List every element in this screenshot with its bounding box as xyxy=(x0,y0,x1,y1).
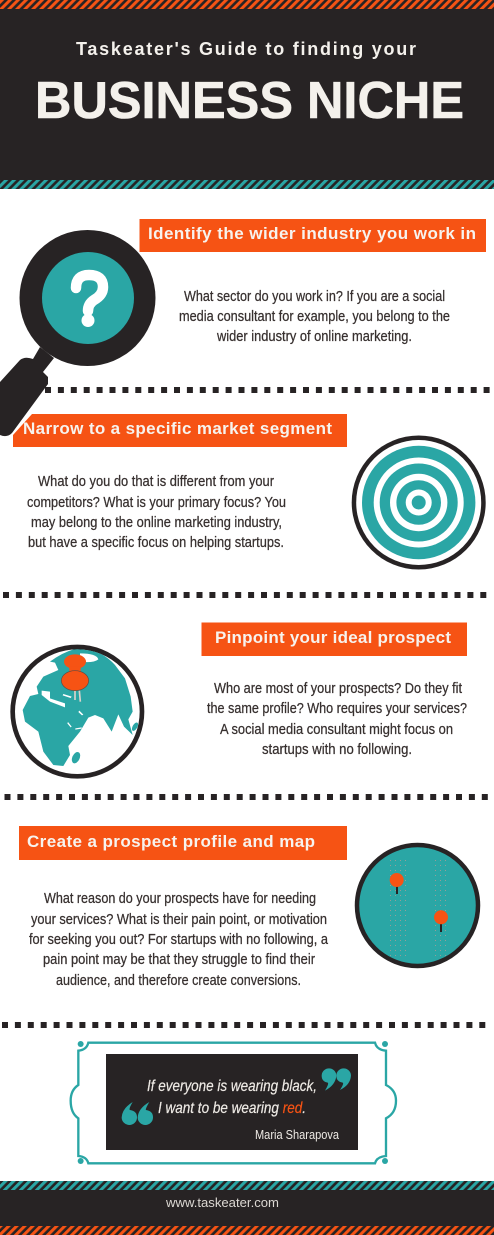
heading bar 4 xyxy=(19,826,347,860)
body text 2: but have a specific focus on helping startups. xyxy=(28,535,284,551)
section 3: ideal prospect xyxy=(13,622,467,776)
heading bar 2 xyxy=(13,414,347,447)
body text 1 xyxy=(179,289,450,345)
heading bar 3 xyxy=(202,622,467,656)
icon: closing quote mark xyxy=(322,1068,351,1091)
body text 3: Who are most of your prospects? Do they fit xyxy=(214,681,462,697)
divider dots xyxy=(2,390,491,1025)
footer banner xyxy=(0,1181,494,1235)
body text 4: for seeking you out? For startups with no following, a xyxy=(29,932,329,948)
quote box xyxy=(106,1054,358,1150)
header banner xyxy=(0,0,494,189)
header subtitle: Taskeater's Guide to finding your xyxy=(76,39,416,59)
ornate frame xyxy=(71,1041,396,1164)
quote author: Maria Sharapova xyxy=(255,1128,339,1142)
quote text xyxy=(147,1078,317,1117)
heading bar 3: Pinpoint your ideal prospect xyxy=(215,628,451,647)
body text 3 xyxy=(207,681,467,758)
icon: magnifying glass xyxy=(0,230,156,436)
body text 1: media consultant for example, you belong to the xyxy=(179,309,450,325)
body text 4: your services? What is their pain point, or motivation xyxy=(31,912,327,928)
icon: map with pins xyxy=(357,845,478,966)
body text 1: What sector do you work in? If you are a social xyxy=(184,289,445,305)
body text 4: audience, and therefore create conversions. xyxy=(56,973,301,989)
section 2: market segment xyxy=(13,414,486,570)
body text 2: may belong to the online marketing industry, xyxy=(31,515,282,531)
body text 3: A social media consultant might focus on xyxy=(220,722,453,738)
body text 2: What do you do that is different from your xyxy=(38,474,274,490)
section 4: prospect profile xyxy=(19,826,478,989)
heading bar 1 xyxy=(140,219,486,252)
body text 2 xyxy=(27,474,286,551)
icon: opening quote mark xyxy=(122,1102,153,1125)
quote panel xyxy=(71,1041,396,1164)
quote text: If everyone is wearing black, xyxy=(147,1078,317,1095)
heading bar 1: Identify the wider industry you work in xyxy=(148,224,476,243)
heading bar 4: Create a prospect profile and map xyxy=(27,832,315,851)
body text 3: startups with no following. xyxy=(262,742,412,758)
header title: BUSINESS NICHE xyxy=(35,72,464,130)
body text 1: wider industry of online marketing. xyxy=(216,329,412,345)
body text 4 xyxy=(29,891,329,989)
quote text: I want to be wearing red. xyxy=(158,1100,306,1117)
icon: target xyxy=(352,436,486,570)
heading bar 2: Narrow to a specific market segment xyxy=(23,419,332,438)
footer url: www.taskeater.com xyxy=(165,1195,279,1210)
body text 2: competitors? What is your primary focus? You xyxy=(27,495,286,511)
section 1: identify industry xyxy=(0,219,486,436)
body text 4: pain point may be that they struggle to find their xyxy=(43,952,315,968)
body text 4: What reason do your prospects have for needing xyxy=(44,891,316,907)
icon: globe with pin xyxy=(13,647,142,776)
